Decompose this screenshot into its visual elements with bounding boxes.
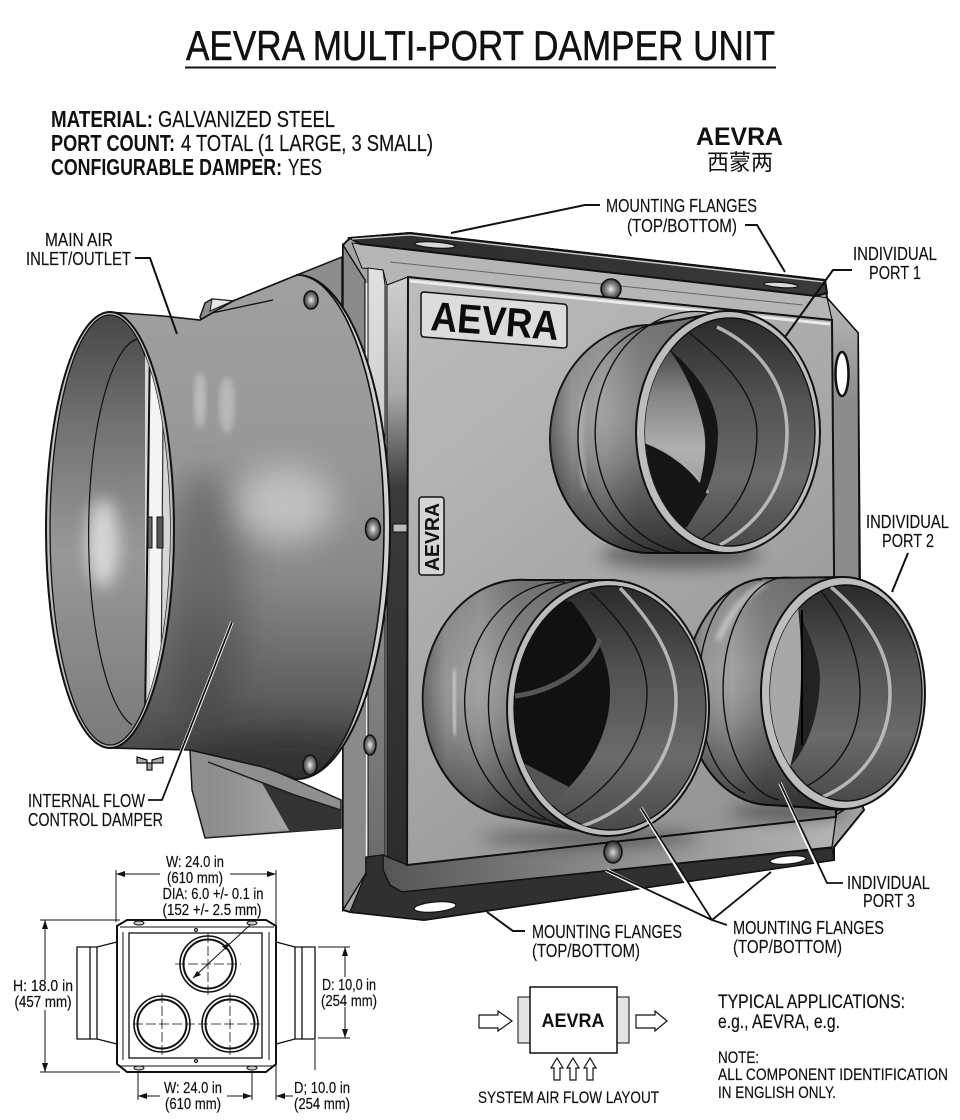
typical applications text xyxy=(718,992,905,1033)
callout: mounting flanges top xyxy=(451,196,785,272)
callout: internal flow control damper xyxy=(28,622,232,830)
dimension labels: (610 mm) xyxy=(165,1096,221,1113)
specifications text block: CONFIGURABLE DAMPER: xyxy=(51,154,282,180)
callout: individual port 2: PORT 2 xyxy=(882,531,934,551)
dimension arrowheads xyxy=(42,871,348,1099)
brand plate large: AEVRA xyxy=(429,293,561,349)
callout: main air inlet xyxy=(26,230,177,334)
dimension labels: W: 24.0 in xyxy=(164,1080,222,1097)
side ducts xyxy=(77,942,315,1044)
top and bottom flange slots xyxy=(414,241,848,914)
individual port 1 xyxy=(550,311,820,553)
callout: individual port 3 xyxy=(780,783,930,911)
specifications text block: YES xyxy=(288,154,322,180)
dimension labels xyxy=(13,854,377,1113)
brand block: AEVRA xyxy=(696,123,783,151)
dimension labels: (254 mm) xyxy=(294,1096,350,1113)
top panel screw xyxy=(601,279,621,299)
individual port 3 xyxy=(423,580,709,836)
flange screws xyxy=(303,291,380,775)
callout: mounting flanges bottom left: (TOP/BOTTOM) xyxy=(532,941,640,961)
typical applications text: TYPICAL APPLICATIONS: xyxy=(718,992,905,1013)
main air inlet cone with flange xyxy=(45,274,391,780)
title: AEVRA MULTI-PORT DAMPER UNIT xyxy=(186,22,775,69)
plate outline xyxy=(117,920,276,1072)
centre lines xyxy=(133,933,263,1058)
dimension labels: D; 10.0 in xyxy=(294,1080,350,1097)
callout: mounting flanges bottom right: MOUNTING FLANGES xyxy=(733,918,884,938)
note text: NOTE: xyxy=(718,1048,759,1067)
note text: IN ENGLISH ONLY. xyxy=(718,1083,836,1102)
dimension lines xyxy=(40,870,350,1100)
specifications text block: 4 TOTAL (1 LARGE, 3 SMALL) xyxy=(181,130,433,156)
port drop shadows xyxy=(480,541,850,846)
brand block xyxy=(696,123,783,175)
callout: main air inlet: MAIN AIR xyxy=(45,230,113,250)
lower panel screws xyxy=(364,735,622,863)
dimension labels: (457 mm) xyxy=(14,994,72,1011)
rear housing box xyxy=(190,257,342,838)
brand block: 西蒙两 xyxy=(707,150,773,175)
dimension labels: (152 +/- 2.5 mm) xyxy=(162,902,262,919)
dimension labels: (610 mm) xyxy=(167,870,223,887)
dimension labels: D: 10,0 in xyxy=(322,977,376,994)
callout: mounting flanges bottom right xyxy=(606,808,884,957)
dimension labels: H: 18.0 in xyxy=(13,978,73,995)
callout: mounting flanges bottom left: MOUNTING FLANGES xyxy=(532,922,682,942)
system air flow diagram xyxy=(478,987,667,1107)
main product illustration xyxy=(46,233,925,920)
system air flow diagram: AEVRA xyxy=(542,1011,605,1032)
callout: mounting flanges top: (TOP/BOTTOM) xyxy=(627,216,737,236)
technical dimension drawing xyxy=(13,854,377,1113)
note text xyxy=(718,1048,948,1102)
ports xyxy=(134,936,258,1052)
side stud xyxy=(393,524,407,532)
wing nut xyxy=(137,757,163,770)
individual port 2 xyxy=(685,577,925,810)
specifications text block: MATERIAL: xyxy=(51,106,153,132)
mounting frame plate xyxy=(343,233,864,920)
vertical brand plate: AEVRA xyxy=(422,503,444,571)
system air flow diagram: SYSTEM AIR FLOW LAYOUT xyxy=(478,1088,659,1107)
callout: individual port 1: PORT 1 xyxy=(869,263,921,283)
specifications text block xyxy=(51,106,433,180)
dimension labels: (254 mm) xyxy=(321,993,377,1010)
front panel xyxy=(407,277,836,865)
callout: mounting flanges bottom right: (TOP/BOTTOM) xyxy=(733,937,842,957)
typical applications text: e.g., AEVRA, e.g. xyxy=(718,1012,840,1033)
dimension labels: DIA: 6.0 +/- 0.1 in xyxy=(162,886,264,903)
callout: individual port 1 xyxy=(785,244,937,337)
callout: individual port 3: INDIVIDUAL xyxy=(847,873,930,893)
flow arrows xyxy=(479,1011,667,1080)
callout: internal flow control damper: INTERNAL FLOW xyxy=(28,791,145,811)
specifications text block: PORT COUNT: xyxy=(51,130,175,156)
callout: internal flow control damper: CONTROL DAMPER xyxy=(28,810,163,830)
callout: mounting flanges bottom left xyxy=(487,912,682,961)
slots and screws xyxy=(134,921,257,1070)
callout: mounting flanges top: MOUNTING FLANGES xyxy=(606,196,757,216)
callout: individual port 2 xyxy=(866,512,949,592)
dimension labels: W: 24.0 in xyxy=(166,854,224,871)
callout: individual port 1: INDIVIDUAL xyxy=(853,244,937,264)
callout: individual port 3: PORT 3 xyxy=(863,891,915,911)
specifications text block: GALVANIZED STEEL xyxy=(158,106,335,132)
callout: main air inlet: INLET/OUTLET xyxy=(26,249,131,269)
